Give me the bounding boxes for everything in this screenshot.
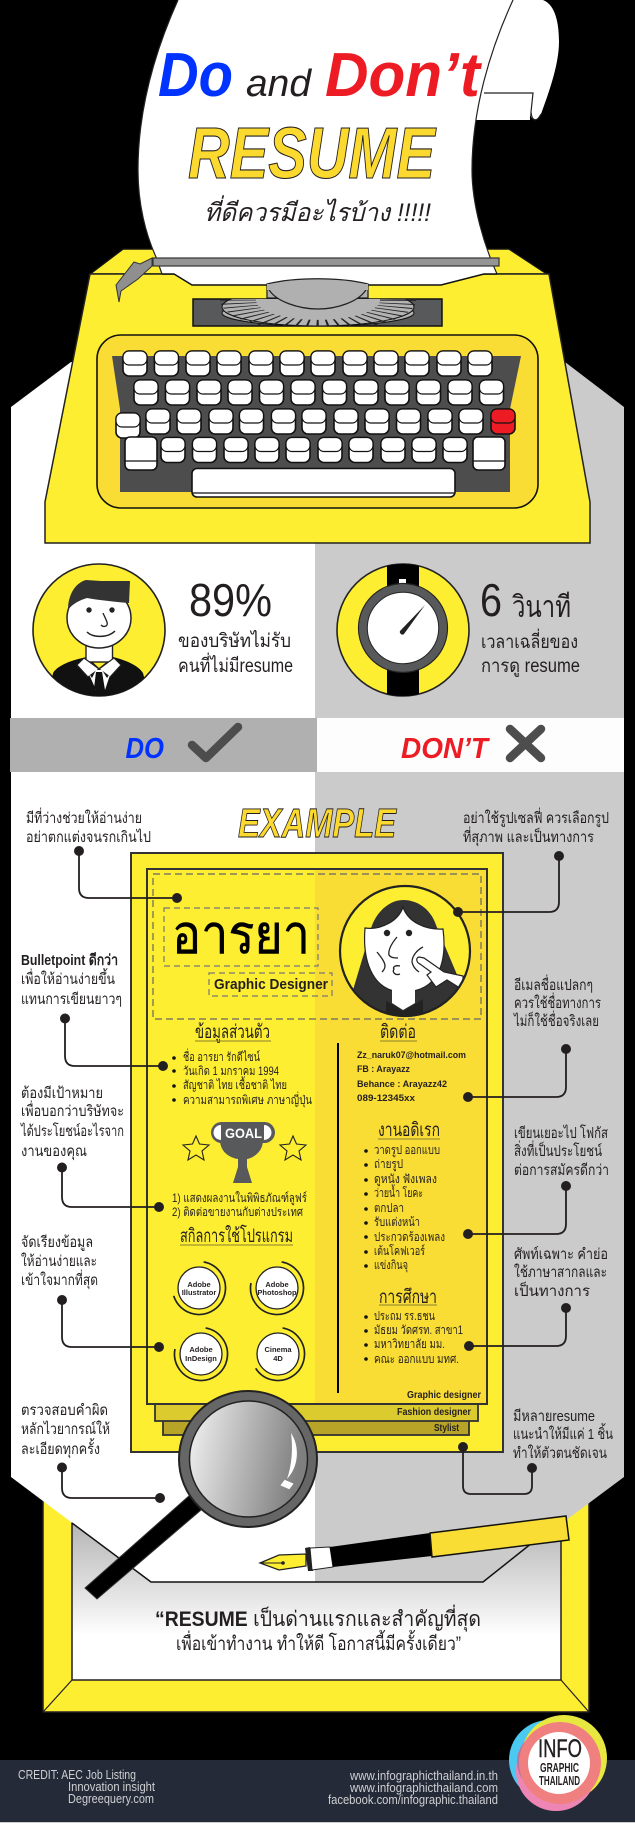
stat value: 6 seconds (480, 574, 571, 626)
personal details list: ความสามารถพิเศษ ภาษาญี่ปุ่น (183, 1091, 312, 1108)
column divider (337, 1043, 339, 1393)
contact details: Behance : Arayazz42 (357, 1079, 447, 1090)
callout: focus (463, 1124, 609, 1239)
paper scroll (470, 0, 559, 120)
icon: magnifying glass (85, 1391, 317, 1599)
stat value: 89%: 89% (189, 574, 272, 626)
panel: don't header (317, 718, 624, 772)
callout: proofreading: ละเอียดทุกครั้ง (21, 1438, 100, 1459)
website links: www.infographicthailand.in.th (349, 1768, 498, 1783)
logo: GRAPHIC (540, 1760, 579, 1775)
subtitle: ที่ดีควรมีอะไรบ้าง !!!!! (204, 195, 431, 227)
goals list: 2) ติดต่อขายงานกับต่างประเทศ (172, 1205, 303, 1219)
typewriter body (45, 274, 590, 543)
keyboard surround (97, 335, 538, 508)
red key (491, 409, 515, 434)
quote: “RESUME เป็นด่านแรกและสำคัญที่สุด (155, 1604, 481, 1632)
stat value: 6 seconds: 6 (480, 574, 502, 626)
personal details list: ชื่อ อารยา รักดีไซน์ (183, 1048, 260, 1064)
goals list (172, 1191, 307, 1219)
callout: terminology: ศัพท์เฉพาะ คำย่อ (514, 1246, 608, 1263)
resume outer board (131, 853, 503, 1452)
type basket (193, 299, 442, 326)
personal details list: สัญชาติ ไทย เชื้อชาติ ไทย (183, 1076, 287, 1092)
don't label: DON’T (401, 733, 490, 765)
heading: software skills (180, 1224, 293, 1247)
skill: indesign (170, 1323, 232, 1385)
large right key (473, 437, 505, 470)
education list: คณะ ออกแบบ มทศ. (374, 1352, 459, 1366)
heading: software skills: สกิลการใช้โปรแกรม (180, 1224, 293, 1247)
skill: photoshop: Adobe (265, 1280, 289, 1289)
icon: businessman (33, 564, 165, 700)
callout: focus: เขียนเยอะไป โฟกัส (514, 1124, 608, 1142)
icon: check mark (192, 727, 238, 758)
logo: INFO (538, 1735, 582, 1763)
callout: focus: ต่อการสมัครดีกว่า (514, 1162, 609, 1179)
callout: selfie (453, 807, 609, 917)
stat text: เวลาเฉลี่ยของ (481, 628, 578, 653)
callout: multiple resumes: ทำให้ตัวตนชัดเจน (513, 1444, 607, 1462)
type fan (220, 299, 416, 326)
credits (18, 1767, 155, 1806)
panel: resume example (131, 853, 503, 1452)
stat: 89 percent (33, 564, 293, 700)
stylist page (163, 1418, 469, 1435)
callout: bullet points: Bulletpoint ดีกว่า (21, 952, 118, 969)
callout: proofreading: ตรวจสอบคำผิด (21, 1402, 108, 1419)
education list: มหาวิทยาลัย มม. (374, 1337, 445, 1351)
typewriter lid (90, 249, 547, 274)
stat text: คนที่ไม่มีresume (178, 652, 293, 677)
callout: email: ไม่ก็ใช้ชื่อจริงเลย (513, 1010, 599, 1030)
header dashed guide (153, 874, 481, 1019)
contact details: Zz_naruk07@hotmail.com (357, 1050, 466, 1061)
icon: goal trophy: GOAL (225, 1125, 262, 1141)
skill: cinema 4d: Cinema (264, 1345, 292, 1354)
portrait (340, 886, 480, 1020)
credits: CREDIT: AEC Job Listing (18, 1767, 136, 1782)
callout: white space (26, 807, 182, 903)
title: do: Do (158, 41, 233, 110)
skill: illustrator: Illustrator (182, 1288, 216, 1297)
example heading: EXAMPLE (238, 800, 397, 846)
callout: goals: เพื่อบอกว่าบริษัทจะ (21, 1100, 124, 1120)
keys (116, 351, 504, 462)
paper lever (116, 258, 152, 302)
callout: goals: งานของคุณ (21, 1143, 87, 1161)
name dashed guide (164, 908, 318, 966)
stat value: 6 seconds: วินาที (512, 591, 571, 624)
callout: white space: อย่าตกแต่งจนรกเกินไป (26, 828, 151, 846)
callout: multiple resumes (458, 1408, 613, 1494)
typewriter (45, 0, 590, 543)
skill: photoshop: Photoshop (257, 1288, 297, 1297)
callout: terminology (464, 1246, 608, 1351)
stat: 6 seconds (337, 560, 580, 700)
paper sheet (138, 0, 513, 285)
heading: education: การศึกษา (379, 1287, 437, 1308)
icon: stopwatch (337, 560, 469, 700)
callout: selfie: ที่สุภาพ และเป็นทางการ (463, 826, 594, 847)
education list (364, 1309, 463, 1366)
personal details list (172, 1048, 312, 1108)
callout: goals: ต้องมีเป้าหมาย (21, 1085, 103, 1102)
heading: contact: ติดต่อ (380, 1022, 416, 1043)
large left key (125, 437, 157, 470)
paper bail bar (153, 258, 499, 266)
quote (155, 1604, 481, 1655)
icon: cross mark (510, 729, 541, 758)
callout: goals: ได้ประโยชน์อะไรจาก (20, 1122, 124, 1140)
stylist page: Stylist (434, 1423, 460, 1434)
heading: personal information: ข้อมูลส่วนตัว (195, 1022, 270, 1043)
hobbies list: ดูหนัง ฟังเพลง (374, 1172, 437, 1187)
callout: selfie: อย่าใช้รูปเซลฟี่ ควรเลือกรูป (463, 807, 609, 827)
space bar (192, 468, 455, 497)
hobbies list: ประกวดร้องเพลง (374, 1230, 445, 1244)
personal details list: วันเกิด 1 มกราคม 1994 (183, 1064, 279, 1078)
website links (328, 1768, 498, 1807)
fashion designer page: Fashion designer (397, 1407, 471, 1418)
skill: illustrator (168, 1257, 230, 1319)
callout: email: อีเมลชื่อแปลกๆ (514, 974, 593, 994)
skill: cinema 4d (247, 1323, 309, 1385)
logo (509, 1715, 607, 1811)
panel: do header (10, 718, 317, 772)
credits: Innovation insight (68, 1779, 155, 1794)
education list: มัธยม วัดศรท. สาขา1 (374, 1323, 463, 1337)
contact details: 089-12345xx (357, 1093, 416, 1104)
callout: proofreading (21, 1402, 165, 1503)
stat text (481, 628, 580, 677)
hobbies list: แข่งกินจุ (374, 1258, 408, 1273)
callout: bullet points: เพื่อให้อ่านง่ายขึ้น (21, 968, 115, 988)
callout: email: ควรใช้ชื่อทางการ (514, 992, 601, 1012)
credits: Degreequery.com (68, 1791, 154, 1806)
hobbies list: ถ่ายรูป (374, 1157, 403, 1172)
callout: bullet points (21, 952, 168, 1071)
callout: terminology: เป็นทางการ (514, 1281, 590, 1300)
icon: fountain pen (260, 1516, 569, 1571)
skill: cinema 4d: 4D (273, 1354, 283, 1363)
title: resume: RESUME (188, 114, 437, 194)
icon: left star (183, 1136, 209, 1160)
stat text: การดู resume (481, 656, 580, 677)
logo: THAILAND (539, 1773, 580, 1788)
callout: goals (20, 1085, 164, 1212)
title: and: and (246, 63, 313, 105)
resume page (147, 869, 487, 1404)
callout: bullet points: แทนการเขียนยาวๆ (21, 991, 122, 1008)
roller (267, 279, 368, 298)
website links: www.infographicthailand.com (349, 1780, 498, 1795)
envelope frame (43, 1495, 589, 1712)
stat text (178, 630, 293, 677)
goals list: 1) แสดงผลงานในพิพิธภัณฑ์ลูฟร์ (172, 1191, 307, 1206)
callout: terminology: ใช้ภาษาสากลและ (514, 1263, 607, 1281)
icon: right star (280, 1136, 306, 1160)
job title (209, 973, 332, 996)
hobbies list: รับแต่งหน้า (374, 1215, 420, 1229)
heading: hobbies: งานอดิเรก (378, 1120, 440, 1141)
fashion designer page (155, 1402, 478, 1421)
name: อารยา (172, 905, 310, 965)
callout: email (463, 974, 601, 1102)
icon: goal trophy (183, 1122, 306, 1183)
title: don't: Don’t (325, 41, 482, 110)
contact details: FB : Arayazz (357, 1064, 410, 1075)
callout: ordering (21, 1234, 164, 1352)
keyboard bed (112, 356, 521, 492)
page label: graphic designer: Graphic designer (407, 1390, 481, 1401)
callout: proofreading: หลักไวยากรณ์ให้ (21, 1420, 110, 1438)
contact details (357, 1050, 466, 1104)
panel: do and don't background (11, 362, 624, 1582)
hobbies list: วาดรูป ออกแบบ (374, 1143, 440, 1158)
skill: indesign: Adobe (189, 1345, 213, 1354)
footer bar (0, 1760, 635, 1823)
callout: multiple resumes: มีหลายresume (513, 1408, 595, 1425)
hobbies list: ว่ายน้ำ โยคะ (374, 1184, 423, 1200)
quote: เพื่อเข้าทำงาน ทำให้ดี โอกาสนี้มีครั้งเดียว” (176, 1630, 461, 1655)
hobbies list: เต้นโคฟเวอร์ (374, 1244, 425, 1258)
callout: ordering: ให้อ่านง่ายและ (21, 1252, 97, 1270)
website links: facebook.com/infographic.thailand (328, 1792, 498, 1807)
hobbies list (364, 1143, 445, 1273)
hobbies list: ตกปลา (374, 1201, 404, 1215)
skill: indesign: InDesign (185, 1354, 217, 1363)
callout: ordering: จัดเรียงข้อมูล (21, 1234, 93, 1251)
education list: ประถม รร.ธชน (374, 1309, 435, 1323)
callout: focus: สิ่งที่เป็นประโยชน์ (514, 1140, 602, 1160)
do label: DO (126, 733, 164, 765)
callout: white space: มีที่ว่างช่วยให้อ่านง่าย (26, 807, 142, 827)
skill: photoshop (246, 1257, 308, 1319)
skill: illustrator: Adobe (187, 1280, 211, 1289)
callout: ordering: เข้าใจมากที่สุด (21, 1269, 98, 1290)
stat text: ของบริษัทไม่รับ (178, 630, 291, 652)
job title: Graphic Designer (214, 976, 328, 993)
